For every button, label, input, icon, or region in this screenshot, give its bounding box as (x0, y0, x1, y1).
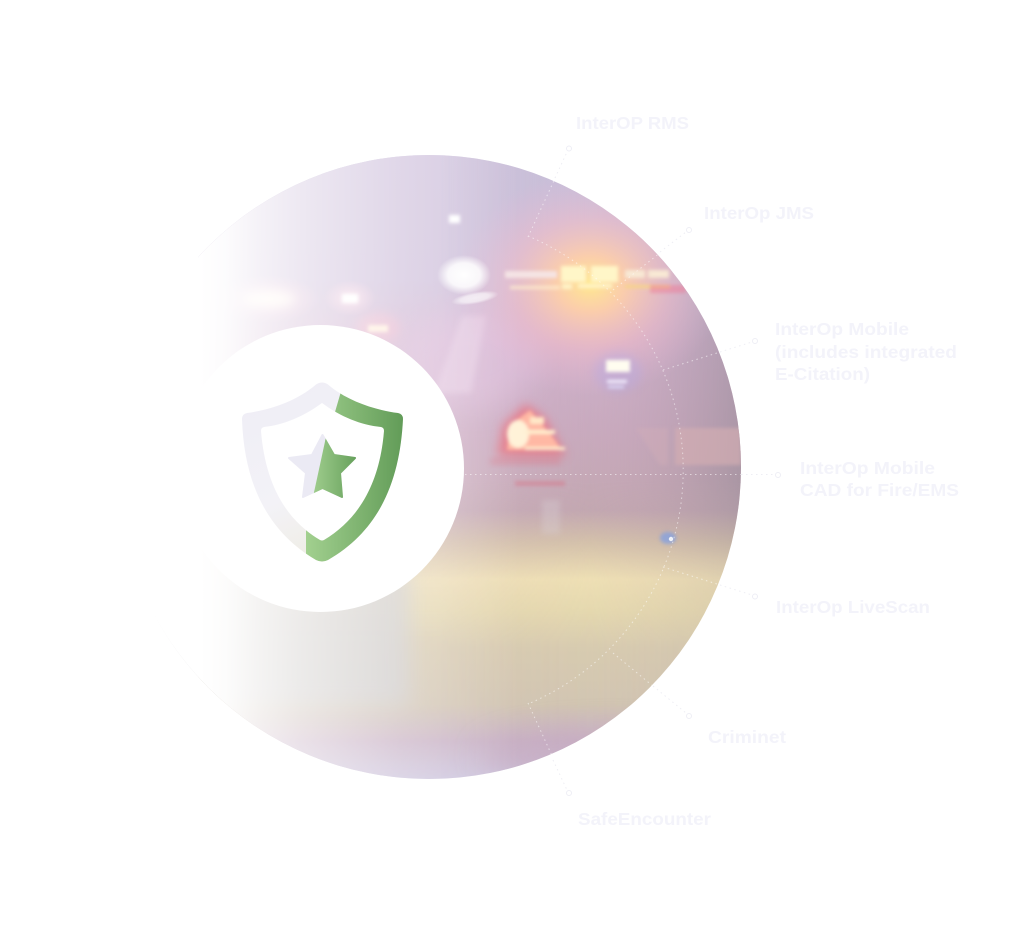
roof light bar (505, 266, 686, 293)
callout: InterOp Mobile: E-Citation) (775, 364, 870, 384)
center white circle badge (235, 325, 464, 612)
callout: InterOp Mobile CAD (776, 458, 959, 500)
callout: Criminet (686, 714, 786, 747)
windshield highlight (439, 318, 482, 392)
callout: InterOp Mobile: (includes integrated (775, 342, 957, 362)
callout: InterOp Mobile: InterOp Mobile (775, 319, 909, 339)
callout: InterOP RMS (566, 113, 689, 151)
photo disc: blurred police car at night (182, 155, 741, 779)
callout: InterOp Mobile (752, 319, 957, 384)
dotted connector network (465, 181, 741, 754)
left white fade (162, 155, 474, 779)
callout: InterOp JMS: InterOp JMS (704, 203, 814, 223)
callout: InterOp JMS (686, 203, 814, 232)
callout: SafeEncounter: SafeEncounter (578, 809, 711, 829)
rear panel (676, 427, 740, 466)
callout: InterOp LiveScan: InterOp LiveScan (776, 597, 930, 617)
callout: InterOp Mobile CAD: CAD for Fire/EMS (800, 480, 959, 500)
blue dash light (596, 352, 640, 388)
callout: InterOP RMS: InterOP RMS (576, 113, 689, 133)
callout: Criminet: Criminet (708, 727, 786, 747)
icon: shield with star (242, 382, 403, 562)
white headlight glare (439, 256, 490, 294)
callout: InterOp Mobile CAD: InterOp Mobile (800, 458, 935, 478)
callout: SafeEncounter (566, 790, 711, 829)
roof light glow (486, 192, 701, 375)
left distant lights (216, 275, 320, 323)
blue reflection (660, 532, 676, 544)
tail light (497, 404, 566, 456)
